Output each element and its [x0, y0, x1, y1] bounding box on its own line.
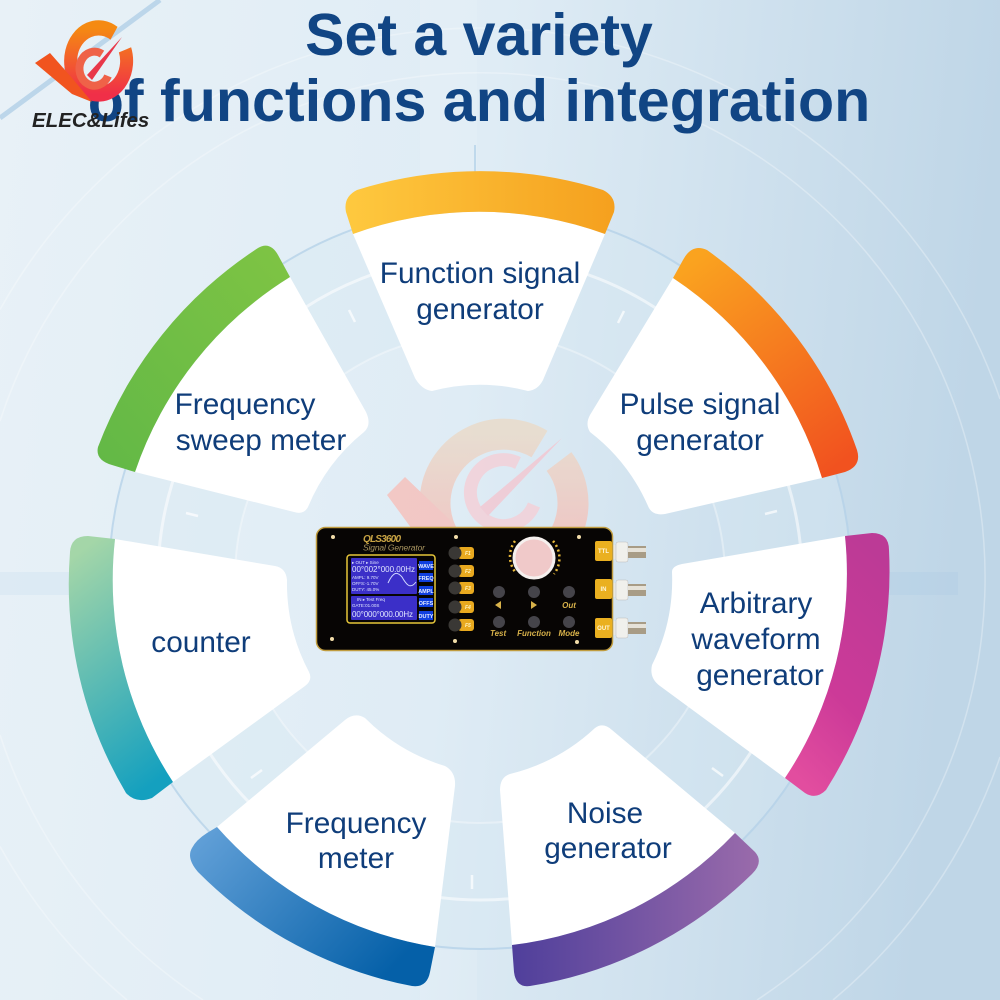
logo text: ELEC&Lifes: [32, 109, 149, 132]
screen: OFFS:-1.70V: [352, 581, 379, 586]
label: Noise: [567, 797, 643, 830]
label: Frequency: [175, 388, 315, 421]
device title text: [363, 534, 426, 552]
device: QLS3600 signal generator: [316, 528, 646, 650]
device title text: QLS3600: [363, 534, 401, 545]
F buttons: F1: [465, 551, 471, 557]
port labels: OUT: [597, 626, 610, 632]
panel: Arbitrary waveform generator: [651, 533, 890, 796]
panel: Frequency sweep meter: [98, 246, 369, 513]
title: of functions and integration: [88, 67, 870, 134]
panel: counter: [69, 536, 310, 800]
button labels: Out: [562, 601, 576, 610]
screws: [330, 535, 581, 644]
button labels: [490, 601, 580, 638]
label: generator: [544, 832, 672, 865]
screen: AMPL: [418, 589, 434, 595]
F buttons: F5: [465, 623, 471, 629]
title: [88, 2, 870, 134]
icon: logo mark: [35, 28, 127, 102]
label: generator: [696, 659, 824, 692]
label: waveform: [690, 623, 821, 656]
port labels: IN: [600, 587, 606, 593]
screen: AMPL: 9.70V: [352, 575, 379, 580]
F buttons: F2: [465, 569, 471, 575]
label: meter: [318, 842, 394, 875]
board: [316, 528, 612, 650]
label: sweep meter: [176, 424, 346, 457]
label: counter: [151, 626, 251, 659]
button labels: Function: [517, 629, 551, 638]
F buttons: [448, 546, 474, 632]
screen: ▸ OUT ▸ Sine: [352, 560, 379, 565]
button labels: Test: [490, 629, 506, 638]
button labels: Mode: [559, 629, 580, 638]
screen: [347, 555, 435, 623]
title: Set a variety: [305, 2, 653, 68]
screen: IN ▸ Test Freq: [357, 597, 385, 602]
watermark logo behind device: [387, 434, 573, 572]
screen: DUTY: 45.0%: [352, 587, 379, 592]
screen: GATE:01.00S: [352, 603, 379, 608]
screen: 00°000°000.00Hz: [352, 610, 413, 619]
label: Frequency: [286, 807, 426, 840]
label: Pulse signal: [620, 388, 780, 421]
panel: Noise generator: [500, 725, 759, 986]
screen: WAVE: [418, 564, 434, 570]
label: Function signal: [380, 257, 580, 290]
screen: OFFS: [419, 601, 434, 607]
screen: DUTY: [419, 614, 434, 620]
connectors: [611, 542, 646, 638]
label: Arbitrary: [700, 587, 812, 620]
port labels: [595, 541, 612, 638]
panel: Frequency meter: [190, 715, 455, 986]
round buttons: [493, 586, 575, 628]
panel: Function signal generator: [345, 171, 615, 391]
label: generator: [636, 424, 764, 457]
F buttons: F3: [465, 586, 471, 592]
port labels: TTL: [598, 549, 609, 555]
label: generator: [416, 293, 544, 326]
rotary knob: [510, 538, 559, 578]
logo: ELEC&Lifes: [32, 28, 149, 132]
screen: FREQ: [418, 576, 434, 582]
F buttons: F4: [465, 605, 471, 611]
screen: 00°002°000.00Hz: [352, 565, 415, 574]
panel: Pulse signal generator: [588, 248, 858, 514]
device title text: Signal Generator: [363, 542, 426, 552]
